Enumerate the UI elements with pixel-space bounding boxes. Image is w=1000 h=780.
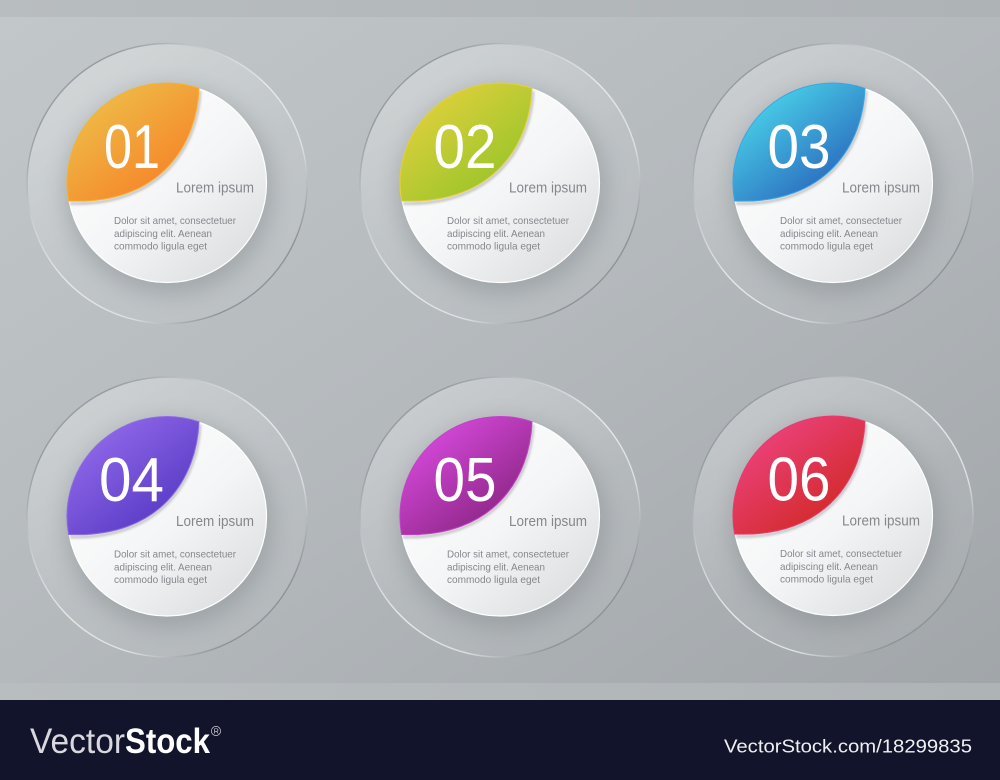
heading: Lorem ipsum [842,180,920,196]
footer bar [0,700,1000,780]
white disc [400,84,600,282]
body text [780,548,902,586]
body text: adipiscing elit. Aenean [780,228,878,240]
panel: circle 06 [693,376,973,656]
glass ring [27,44,307,324]
body text: commodo ligula eget [114,574,207,586]
heading: Lorem ipsum [509,513,587,530]
body text: commodo ligula eget [114,240,207,252]
white disc [400,417,600,616]
number: 02 [434,113,496,182]
body text [447,548,569,586]
body text [114,215,236,252]
leaf shadow [70,91,200,204]
body text: adipiscing elit. Aenean [447,562,545,574]
logo: Stock [125,722,210,761]
body text: Dolor sit amet, consectetuer [780,548,902,560]
body text: commodo ligula eget [447,574,540,586]
glass ring [693,44,973,324]
white disc [734,416,932,616]
body text: commodo ligula eget [447,240,540,252]
body text [447,215,569,252]
leaf shadow [736,424,866,537]
panel: circle 03 [693,44,973,324]
body text: Dolor sit amet, consectetuer [114,215,236,227]
panel: circle 04 [27,377,307,657]
glass ring [27,377,307,657]
image id: VectorStock.com/18299835 [724,736,972,756]
leaf shadow [70,424,200,537]
body text [780,215,902,252]
leaf shadow [403,91,533,204]
heading: Lorem ipsum [176,180,254,196]
body text: commodo ligula eget [780,240,873,252]
glass ring [360,44,640,324]
coloured leaf [400,83,532,201]
body text: Dolor sit amet, consectetuer [447,215,569,227]
body text: adipiscing elit. Aenean [780,561,878,573]
coloured leaf [67,417,199,535]
number: 05 [434,446,496,515]
heading: Lorem ipsum [176,513,254,530]
glass ring [360,377,640,657]
logo [30,722,221,761]
body text [114,548,236,586]
leaf shadow [403,424,533,537]
heading: Lorem ipsum [842,512,920,530]
coloured leaf [400,417,532,535]
number: 04 [99,446,164,515]
number: 03 [768,113,830,182]
panel: circle 05 [360,377,640,657]
heading: Lorem ipsum [509,180,587,196]
body text: commodo ligula eget [780,574,873,586]
coloured leaf [67,83,199,201]
body text: adipiscing elit. Aenean [114,228,212,240]
white disc [68,417,266,616]
logo: R [214,729,219,736]
body text: Dolor sit amet, consectetuer [114,548,236,560]
logo: Vector [30,722,125,761]
body text: Dolor sit amet, consectetuer [447,548,569,560]
glass ring [693,376,973,656]
panel: circle 02 [360,44,640,324]
coloured leaf [733,83,865,201]
panel: circle 01 [27,44,307,324]
number: 06 [768,446,830,514]
body text: adipiscing elit. Aenean [447,228,545,240]
body text: Dolor sit amet, consectetuer [780,215,902,227]
white disc [734,84,932,282]
body text: adipiscing elit. Aenean [114,562,212,574]
white disc [68,84,266,282]
number: 01 [104,113,160,182]
coloured leaf [733,416,865,534]
leaf shadow [736,91,866,204]
